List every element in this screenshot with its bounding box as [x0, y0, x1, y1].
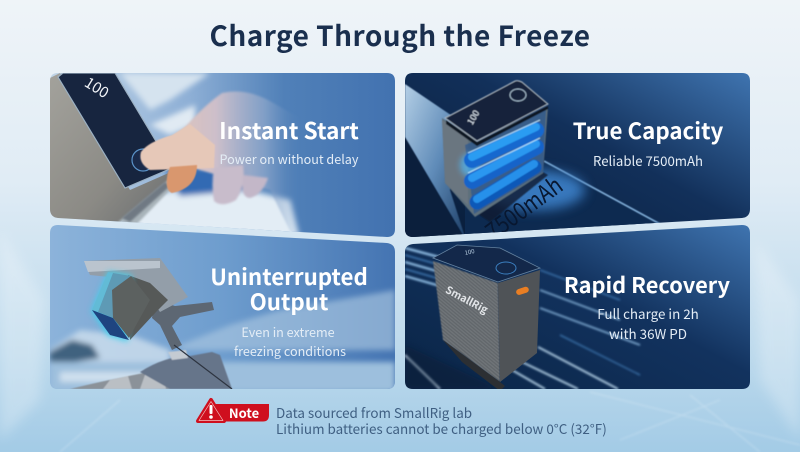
panel: Rapid Recovery: with 36W PD [609, 323, 687, 343]
note: red warning badge [198, 400, 269, 422]
heading: Rapid Recovery [564, 269, 731, 300]
screen readout: 100 [464, 246, 476, 257]
camera arm and cable [152, 300, 232, 389]
icon: hand pressing button [183, 90, 296, 232]
panel: Uninterrupted Output: freezing conditions [234, 341, 346, 360]
monitor [84, 258, 188, 312]
heading: Instant Start [219, 113, 359, 146]
screen readout: 100 [464, 108, 482, 127]
power bank screen [58, 73, 172, 188]
fingertip [140, 124, 215, 170]
subtext: Power on without delay [220, 149, 359, 168]
panel: Uninterrupted Output [50, 225, 395, 392]
wireless charging circle [496, 262, 516, 274]
panel: Uninterrupted Output: Output [250, 285, 328, 317]
brand name: SmallRig [443, 282, 491, 318]
title: Charge Through the Freeze [210, 15, 590, 55]
diagonal light strip [405, 137, 465, 240]
screen readout: 100 [81, 72, 113, 103]
heading: True Capacity [573, 114, 723, 146]
subtext: Full charge in 2h [597, 303, 699, 323]
subtext: Even in extreme [241, 322, 335, 341]
icon: warning triangle [198, 400, 224, 421]
power bank fabric body [50, 73, 180, 222]
panel: True Capacity [405, 73, 750, 247]
note text: Lithium batteries cannot be charged below 0°C (32°F) [276, 418, 607, 438]
panel: Instant Start [50, 72, 395, 243]
speed streaks [405, 248, 640, 389]
icon: camera lens [70, 350, 232, 389]
note: red warning badge: Note [229, 403, 259, 422]
snow and clouds [120, 73, 300, 240]
snowy mountains [50, 290, 395, 392]
note text [276, 402, 607, 438]
icon: power bank with battery cells [442, 81, 548, 222]
panel: Rapid Recovery [405, 225, 750, 391]
7500mAh floor text: 7500mAh [477, 166, 569, 247]
subtext: Reliable 7500mAh [593, 151, 703, 170]
note text: Data sourced from SmallRig lab [276, 402, 472, 422]
USB-C port [516, 286, 529, 295]
heading: Uninterrupted [210, 260, 368, 292]
icon: power bank front [433, 245, 540, 391]
power button [132, 149, 154, 171]
icon: glowing battery [88, 268, 136, 345]
power button [510, 89, 526, 101]
